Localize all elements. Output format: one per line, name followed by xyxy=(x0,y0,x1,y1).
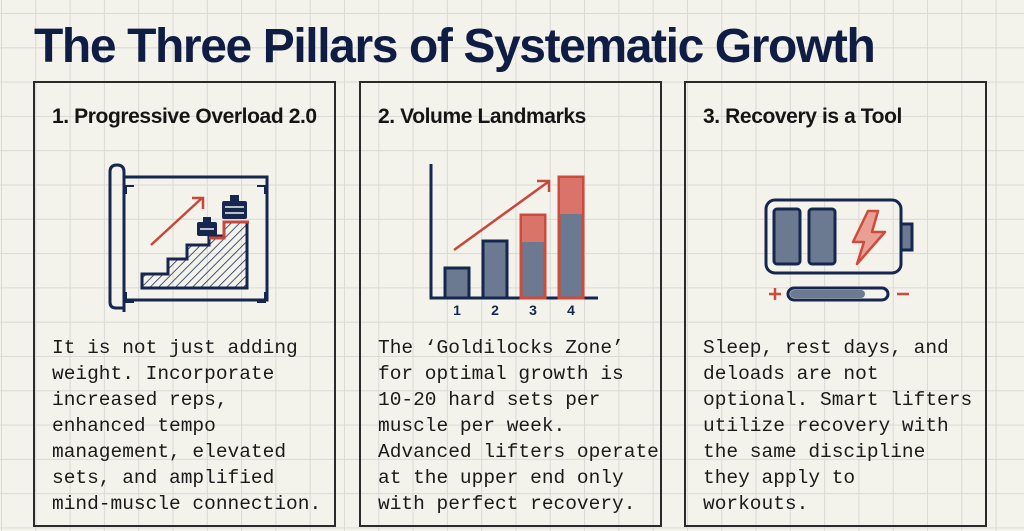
panel: volume landmarks xyxy=(359,81,662,527)
title: The Three Pillars of Systematic Growth xyxy=(34,20,874,73)
heading: 2. Volume Landmarks xyxy=(378,105,586,128)
icon: battery xyxy=(764,198,914,302)
bar chart: 2 xyxy=(491,302,499,318)
bar chart: 4 xyxy=(567,302,575,318)
body text: It is not just adding weight. Incorporate increased reps, enhanced tempo management, elevated sets, and amplified mind-muscle connection. xyxy=(52,337,321,515)
body text: The ‘Goldilocks Zone’ for optimal growth is 10-20 hard sets per muscle per week. Advanced lifters operate at the upper end only with perfect recovery. xyxy=(378,337,659,515)
panel: recovery xyxy=(684,81,987,527)
bar chart: 1 xyxy=(453,302,461,318)
heading: 1. Progressive Overload 2.0 xyxy=(52,105,317,128)
icon: blueprint staircase xyxy=(108,164,268,312)
bar chart: 3 xyxy=(529,302,537,318)
heading: 3. Recovery is a Tool xyxy=(703,105,902,128)
bar chart xyxy=(430,164,598,318)
panel: progressive overload xyxy=(33,81,336,527)
body text: Sleep, rest days, and deloads are not optional. Smart lifters utilize recovery with the same discipline they apply to workouts. xyxy=(703,337,972,515)
